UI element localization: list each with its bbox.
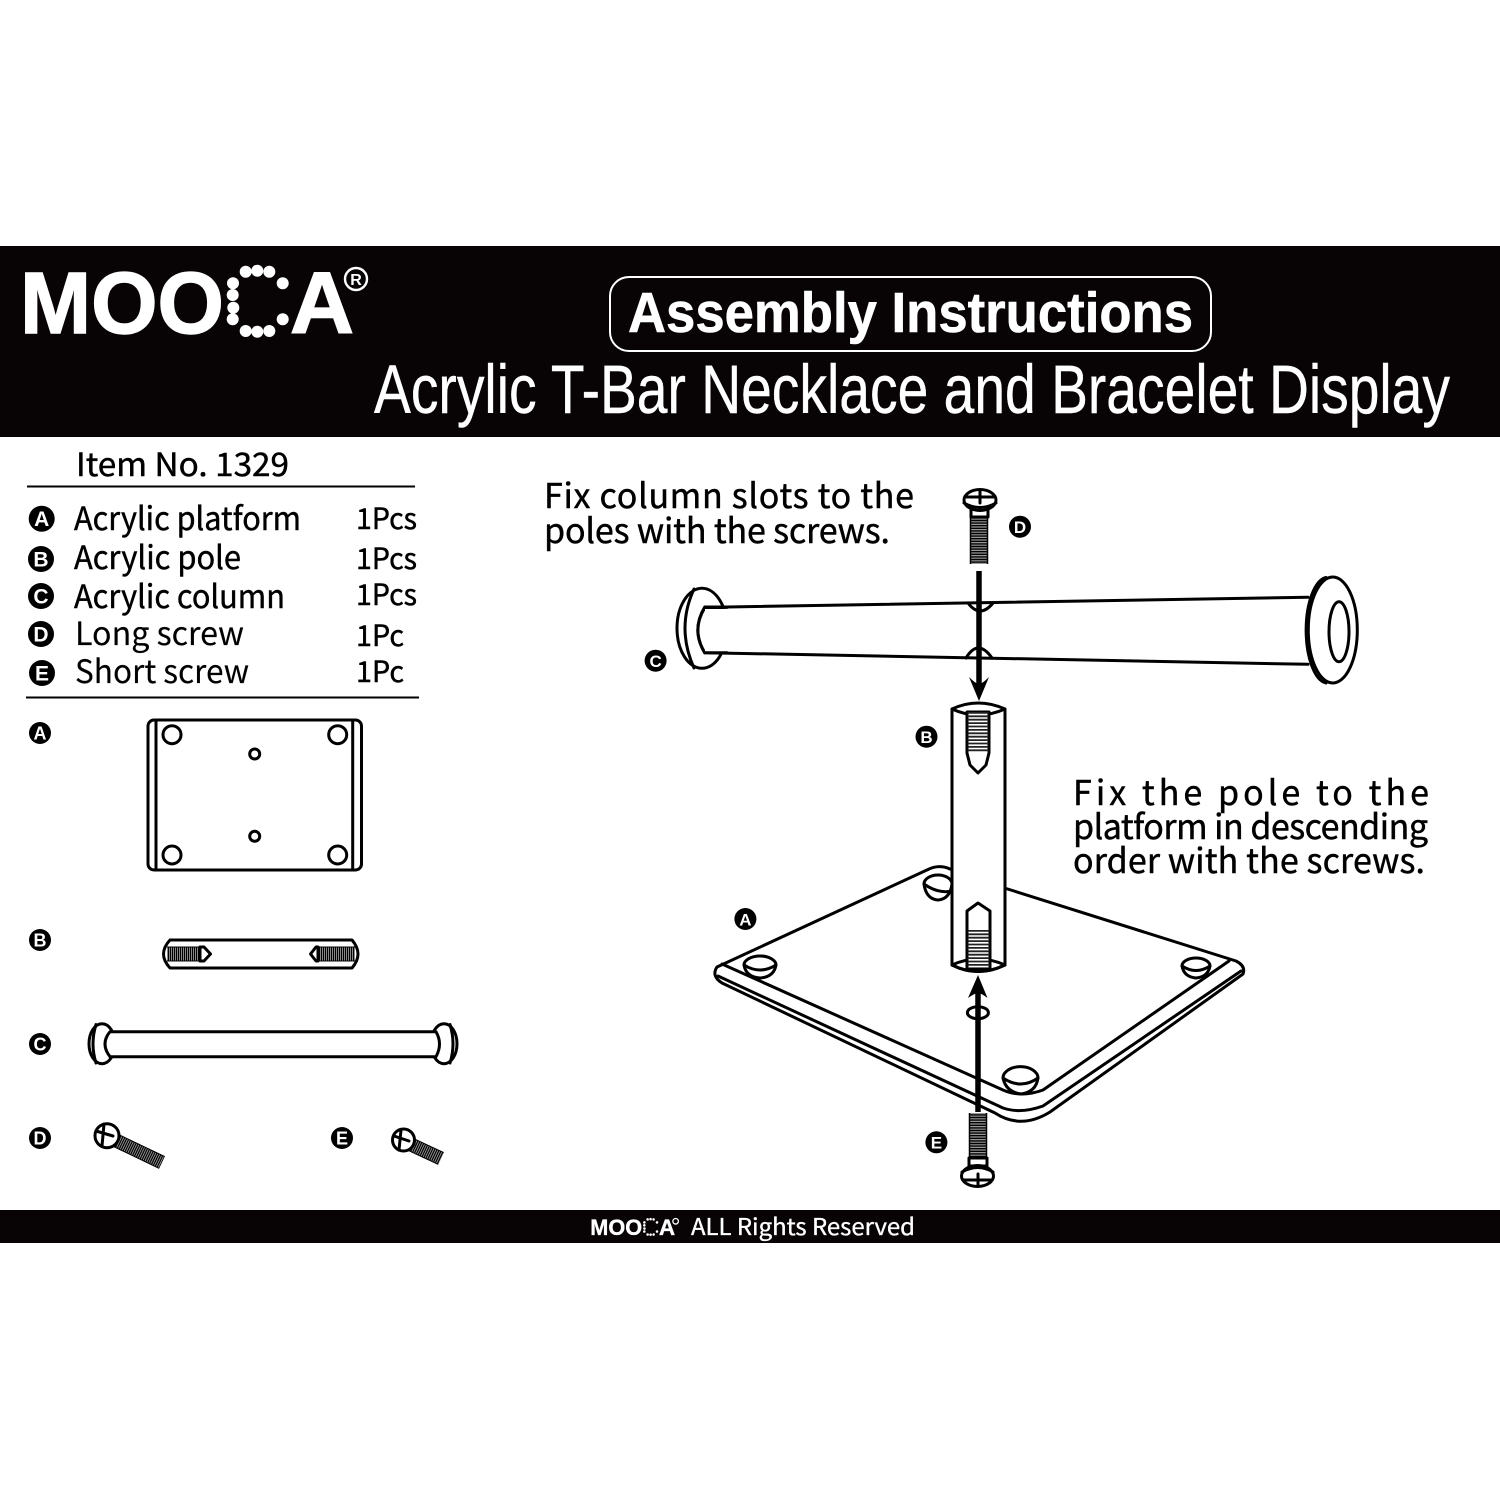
part A: platform top view xyxy=(29,720,362,870)
rubber foot: back xyxy=(924,875,952,900)
row: long screw: 1Pc xyxy=(356,613,404,655)
row: long screw xyxy=(28,609,404,655)
instruction text: fix pole to platform: order with the screws. xyxy=(1073,834,1425,883)
brand logo: MOO xyxy=(20,255,224,352)
part B: pole side view xyxy=(29,929,358,968)
row: acrylic platform: Acrylic platform xyxy=(74,494,301,540)
assembly: pole B xyxy=(916,703,1005,972)
row: short screw: 1Pc xyxy=(356,649,404,691)
instruction text: fix column slots: poles with the screws. xyxy=(544,504,890,553)
instruction text: fix column slots: Fix column slots to the xyxy=(544,469,914,518)
arrow: screw D down into pole xyxy=(969,571,989,701)
part D: long screw: D xyxy=(34,1128,46,1148)
brand logo: R xyxy=(350,272,362,289)
assembly: platform label: A xyxy=(739,910,752,929)
assembly: short screw E: E xyxy=(931,1134,942,1153)
part B: pole side view: B xyxy=(34,930,46,950)
footer band xyxy=(0,1208,1500,1243)
row: long screw: D xyxy=(33,623,49,646)
assembly: column C: C xyxy=(649,652,662,671)
rubber foot: right xyxy=(1182,958,1210,978)
row: acrylic platform: A xyxy=(34,508,49,531)
part D: long screw xyxy=(29,1124,162,1162)
washer xyxy=(967,1007,988,1019)
footer logo: A xyxy=(659,1215,675,1240)
row: acrylic column xyxy=(28,572,417,618)
row: short screw xyxy=(29,647,404,693)
row: short screw: Short screw xyxy=(75,647,249,693)
row: acrylic pole: Acrylic pole xyxy=(74,533,241,579)
assembly: long screw D: D xyxy=(1014,518,1026,537)
part C: column side view xyxy=(29,1024,457,1064)
copyright text: ALL Rights Reserved xyxy=(691,1208,915,1242)
item number: Item No. 1329 xyxy=(76,440,289,486)
rubber foot: front xyxy=(1003,1067,1038,1094)
row: acrylic pole: 1Pcs xyxy=(356,536,417,578)
instruction text: fix pole to platform: platform in descending xyxy=(1073,800,1428,849)
row: acrylic pole xyxy=(28,533,417,579)
brand logo xyxy=(20,255,367,352)
assembly: platform label xyxy=(734,908,756,930)
instruction text: fix pole to platform: Fix the pole to the xyxy=(1073,766,1429,815)
rubber foot: left xyxy=(744,956,776,978)
parts list panel xyxy=(26,440,419,698)
row: acrylic column: 1Pcs xyxy=(356,572,417,614)
instruction text: fix column slots xyxy=(544,469,914,553)
heading badge: assembly instructions: Assembly Instructions xyxy=(628,281,1193,345)
assembly: column C xyxy=(645,577,1357,683)
part E: short screw: E xyxy=(336,1128,348,1148)
footer logo: MOO xyxy=(590,1215,642,1240)
assembly: platform A xyxy=(715,867,1244,1121)
row: short screw: E xyxy=(35,662,49,685)
row: acrylic column: Acrylic column xyxy=(74,572,285,618)
row: acrylic column: C xyxy=(33,585,49,608)
row: acrylic platform: 1Pcs xyxy=(356,496,417,538)
arrow: screw E up into pole xyxy=(968,975,988,1112)
row: long screw: Long screw xyxy=(75,609,244,655)
part C: column side view: C xyxy=(34,1034,46,1054)
header band xyxy=(0,246,1500,437)
brand logo: A xyxy=(290,255,354,352)
part E: short screw xyxy=(331,1127,441,1158)
footer logo xyxy=(590,1215,678,1240)
assembly: short screw E xyxy=(925,1113,994,1186)
row: acrylic platform xyxy=(29,494,417,540)
row: acrylic pole: B xyxy=(33,548,49,571)
assembly: pole B: B xyxy=(920,728,933,747)
assembly: long screw D xyxy=(964,490,1031,564)
part A: platform top view: A xyxy=(34,724,46,744)
instruction text: fix pole to platform xyxy=(1073,766,1429,883)
